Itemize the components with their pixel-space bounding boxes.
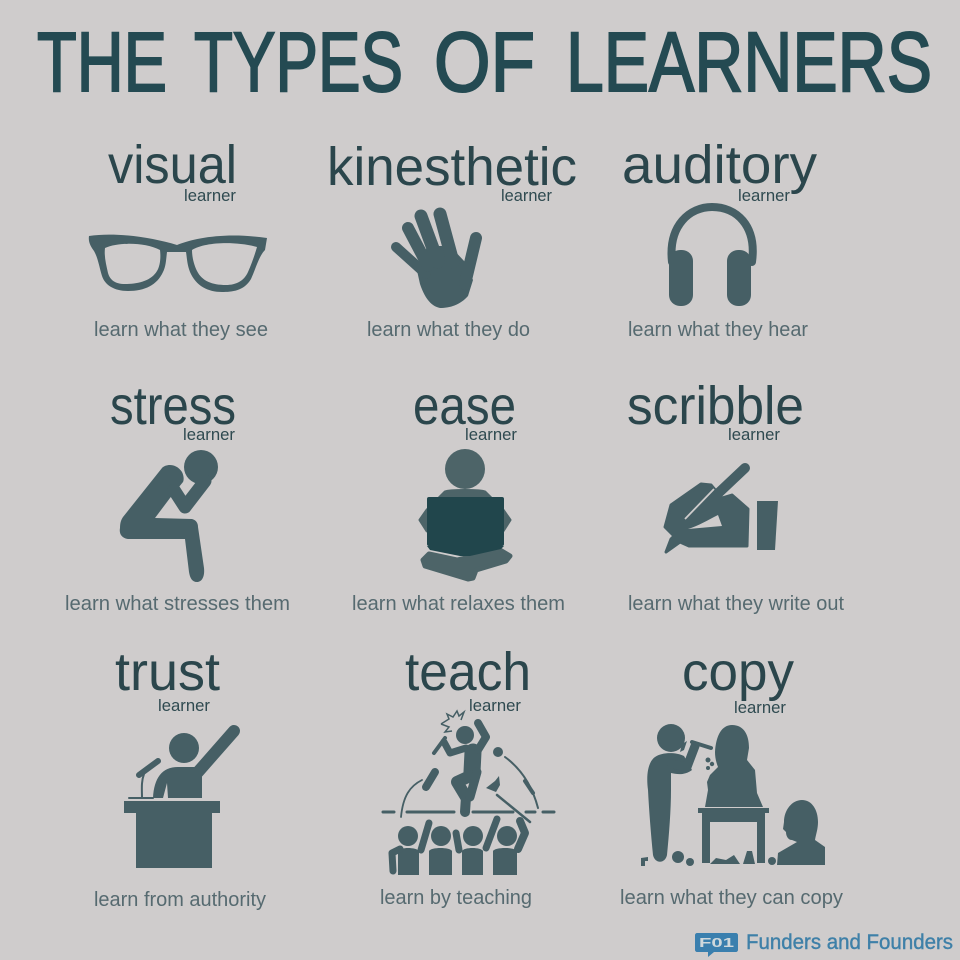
caption: learn what they do [367, 319, 530, 341]
panel: trust learner [94, 642, 266, 911]
caption: learn what they hear [628, 319, 808, 341]
title [37, 15, 932, 109]
heading: teach: teach [405, 642, 531, 702]
label: learner: learner [184, 186, 236, 205]
brand logo: Funders and Founders [695, 931, 953, 957]
caption: learn by teaching [380, 887, 532, 909]
caption: learn from authority [94, 889, 266, 911]
title: TYPES [194, 15, 403, 109]
icon: speaker on stage with audience [383, 711, 554, 875]
heading: auditory: auditory [622, 135, 817, 195]
heading: visual: visual [108, 135, 237, 195]
heading: trust: trust [115, 642, 220, 702]
panel: scribble learner [627, 376, 844, 615]
heading: stress: stress [110, 376, 236, 436]
panel: copy learner [620, 642, 843, 909]
icon: logo badge [695, 933, 738, 957]
panel: teach learner [380, 642, 554, 909]
panel: stress learner [65, 376, 290, 615]
label: learner: learner [734, 698, 786, 717]
label: learner: learner [469, 696, 521, 715]
panel: auditory learner [622, 135, 817, 341]
caption: learn what relaxes them [352, 593, 565, 615]
label: learner: learner [501, 186, 552, 205]
brand name: Funders and Founders [746, 931, 953, 954]
label: learner: learner [183, 425, 235, 444]
caption: learn what they see [94, 319, 268, 341]
panel: kinesthetic learner [327, 137, 577, 341]
label: learner: learner [738, 186, 790, 205]
caption: learn what they can copy [620, 887, 843, 909]
icon: glasses [89, 235, 267, 292]
title: THE [37, 15, 167, 109]
heading: ease: ease [413, 376, 516, 436]
icon: hand writing [665, 468, 778, 552]
icon: headphones [669, 207, 753, 306]
heading: copy: copy [682, 642, 794, 702]
heading: kinesthetic: kinesthetic [327, 137, 577, 197]
icon: person with laptop [420, 449, 510, 579]
label: learner: learner [728, 425, 780, 444]
icon: hand [396, 214, 476, 308]
caption: learn what they write out [628, 593, 844, 615]
label: learner: learner [158, 696, 210, 715]
caption: learn what stresses them [65, 593, 290, 615]
icon: sculptor with bust and observer [641, 724, 825, 866]
icon: stressed seated figure [120, 450, 218, 582]
icon: speaker at podium [124, 731, 234, 868]
heading: scribble: scribble [627, 376, 804, 436]
panel: visual learner [89, 135, 268, 341]
panel: ease learner [352, 376, 565, 615]
icon: logo badge: F01 [699, 935, 734, 950]
title: OF [434, 15, 535, 109]
label: learner: learner [465, 425, 517, 444]
